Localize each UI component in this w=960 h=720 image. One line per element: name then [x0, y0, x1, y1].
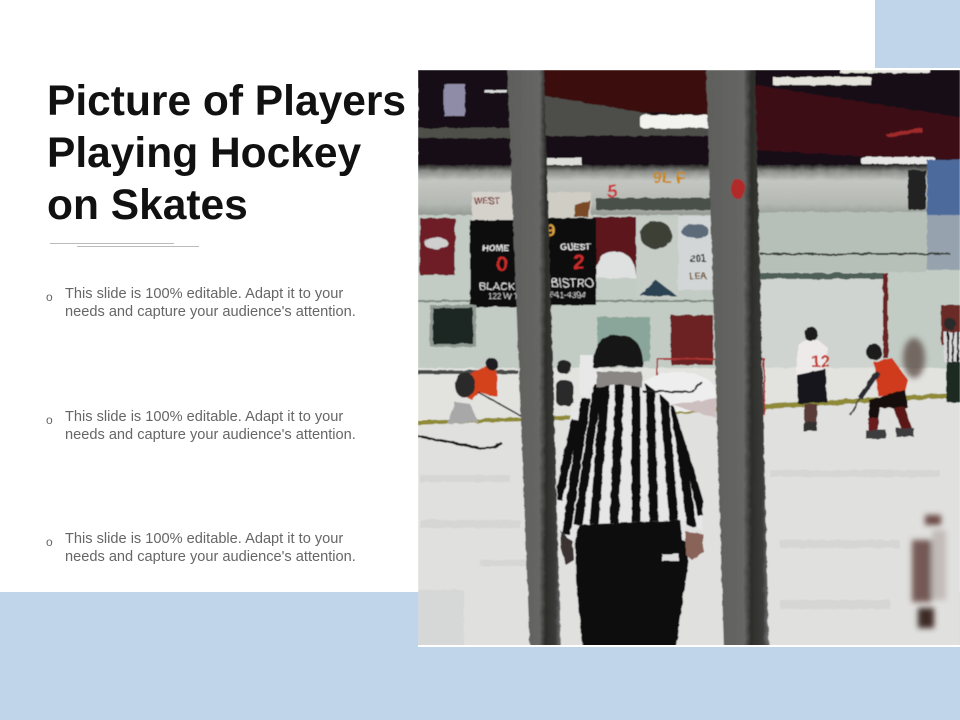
text block: bullet 2: o — [46, 413, 53, 427]
scoreboard: guest: GUEST — [560, 242, 592, 252]
text block: bullet 2: This slide is 100% editable. Adapt it to your — [65, 409, 343, 425]
shirt tails — [566, 520, 686, 542]
text block: bullet 2: needs and capture your audience's attention. — [65, 427, 356, 443]
player: number 12 white jersey: 12 — [811, 352, 830, 371]
goal and goalie — [556, 355, 764, 418]
helmet — [593, 335, 643, 368]
glass post left — [507, 66, 561, 650]
text block: bullet 1: o — [46, 290, 53, 304]
rink ceiling — [418, 70, 960, 166]
glass post right — [706, 66, 769, 650]
text block: bullet 3: This slide is 100% editable. Adapt it to your — [65, 531, 343, 547]
scoreboard: home: BLACKS — [479, 281, 522, 293]
scoreboard: home: 0 — [496, 253, 508, 276]
blurred reflection lower right — [912, 515, 946, 628]
title — [47, 78, 406, 229]
scoreboard: home — [470, 220, 522, 307]
text block: bullet 1: needs and capture your audience's attention. — [65, 304, 356, 320]
background band: bottom — [0, 592, 960, 720]
referee — [550, 335, 710, 650]
referee trousers — [575, 518, 688, 650]
scoreboard clock digits: 9L F — [653, 170, 686, 187]
title: Picture of Players — [47, 78, 406, 125]
scoreboard clock digits — [606, 171, 686, 198]
text block: bullet 3 — [46, 531, 356, 565]
player: orange jersey right — [850, 344, 914, 439]
scoreboard: home: 122 W T — [488, 292, 518, 301]
wall banners — [420, 192, 712, 298]
title: Playing Hockey — [47, 130, 361, 177]
player: number 12 white jersey — [796, 327, 830, 431]
rear wall — [414, 215, 927, 375]
scoreboard: guest: 641-4394 — [550, 290, 586, 300]
insulated wall band — [414, 165, 960, 217]
text block: bullet 1: This slide is 100% editable. Adapt it to your — [65, 286, 343, 302]
trouser label — [662, 554, 679, 561]
photo white border — [418, 68, 960, 647]
scoreboard clock digits: 5 — [607, 182, 618, 203]
scoreboard: guest: 2 — [573, 251, 585, 274]
text block: bullet 3: needs and capture your audience's attention. — [65, 549, 356, 565]
blue patch top right — [927, 160, 960, 215]
wall banners: WEST — [474, 196, 501, 206]
background block: top right — [875, 0, 960, 68]
hockey stick on ice — [418, 436, 502, 448]
collar — [597, 372, 642, 388]
stick across goalie — [642, 382, 702, 392]
title: on Skates — [47, 182, 248, 229]
distant referee right edge — [944, 318, 960, 402]
scoreboard: guest — [546, 218, 596, 305]
wall banners: 201 — [690, 254, 707, 265]
boards and ice — [414, 368, 960, 650]
scoreboard: guest: BISTRO — [551, 278, 594, 290]
text block: bullet 1 — [46, 286, 356, 320]
player: crouching orange jersey — [447, 358, 521, 424]
wall window and door — [430, 305, 713, 365]
wall banners: LEA — [689, 271, 708, 281]
blurred player behind glass — [903, 338, 925, 378]
text block: bullet 2 — [46, 409, 356, 443]
photo: referee and hockey players seen through rink glass — [418, 70, 960, 647]
scoreboard: guest: 9 — [546, 221, 555, 240]
title underline — [50, 243, 199, 247]
text block: bullet 3: o — [46, 535, 53, 549]
referee hands — [560, 527, 703, 565]
scoreboard: home: HOME — [482, 243, 509, 253]
striped jersey — [556, 382, 704, 540]
